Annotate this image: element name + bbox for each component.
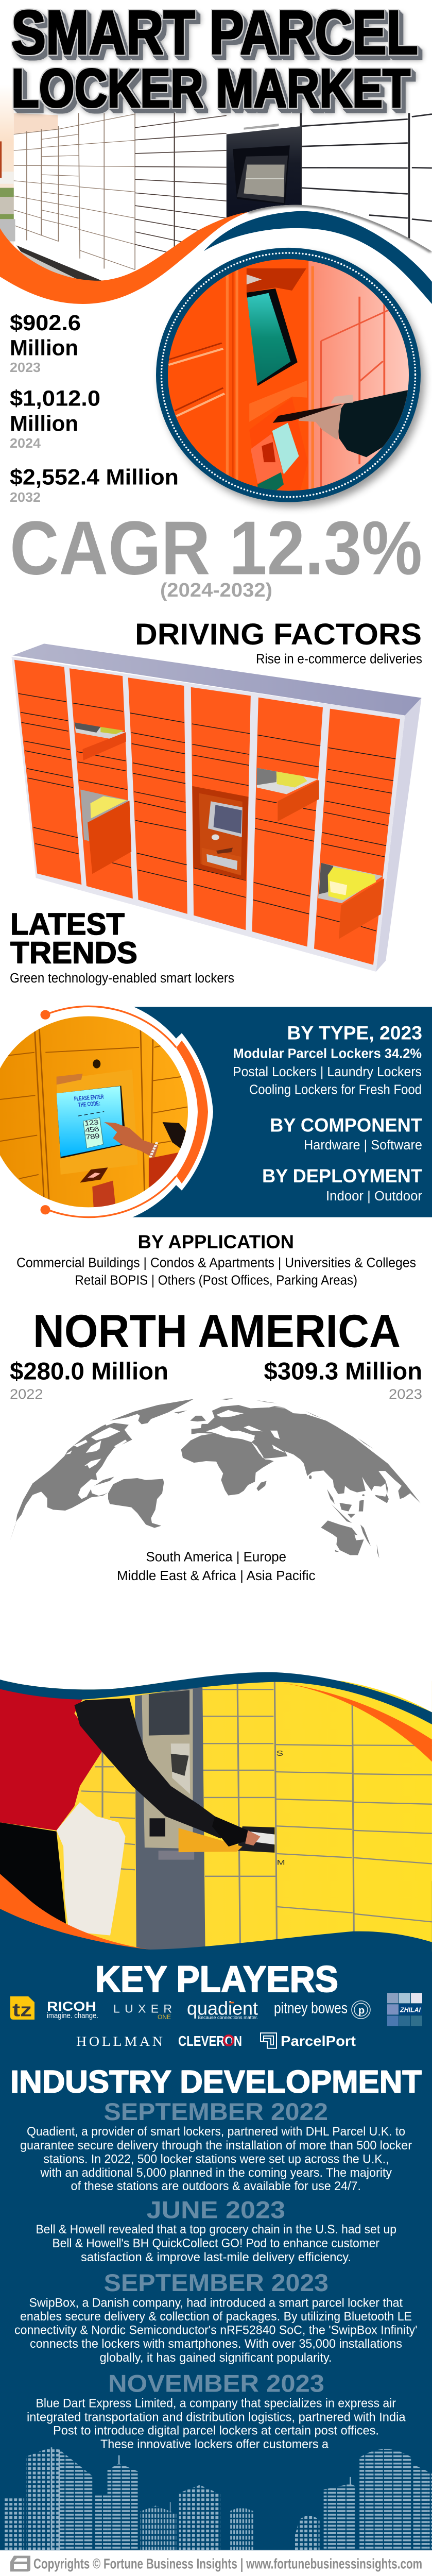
illustration: orange locker bank	[11, 643, 422, 972]
development: November 2023: Blue Dart Express Limited, a company that specializes in express air	[36, 2397, 396, 2410]
U.S. by type: Postal Lockers | Laundry Lockers | Cooling Lockers for Fresh Food	[28, 1643, 404, 1659]
photo: kiosk touch screen	[0, 1015, 191, 1213]
development: September 2022: Quadient, a provider of smart lockers, partnered with DHL Parcel U.K. to	[27, 2125, 405, 2139]
development: November 2023: integrated transportation and distribution logistics, partnered with India	[27, 2411, 406, 2424]
development: June 2023: Bell & Howell revealed that a top grocery chain in the U.S. had set up	[36, 2223, 396, 2236]
driving factors: DRIVING FACTORS	[135, 617, 422, 651]
logo: Pitney Bowes: pitney bowes	[274, 1999, 348, 2016]
heading: by component: BY COMPONENT	[270, 1114, 422, 1136]
other regions	[117, 1549, 315, 1583]
key player logos	[10, 1993, 422, 2049]
development: November 2023: NOVEMBER 2023	[108, 2370, 324, 2397]
development: September 2022: with an additional 5,000 planned in the coming years. The majority	[40, 2166, 392, 2180]
development: September 2023	[14, 2270, 417, 2365]
hero photo: white parcel lockers	[0, 85, 432, 283]
development: September 2023: globally, it has gained significant popularity.	[99, 2351, 332, 2365]
photo: kiosk touch screen: 123	[84, 1118, 99, 1127]
title: Smart Parcel Locker Market	[11, 0, 418, 118]
development: September 2022: of these stations are outdoors & available for use 24/7.	[71, 2179, 361, 2193]
hero waves: orange and blue swooshes	[0, 205, 432, 304]
market value: 2024	[10, 386, 100, 451]
development: September 2022: stations. In 2022, 500 locker stations were set up across the U.K.,	[43, 2153, 389, 2166]
development: September 2023: connects the lockers with smartphones. With over 35,000 installations	[30, 2337, 402, 2351]
type list: Modular Parcel Lockers 34.2%	[233, 1046, 422, 1061]
latest trends	[10, 907, 234, 986]
other regions: South America | Europe	[146, 1549, 286, 1564]
photo: kiosk touch screen: 789	[85, 1132, 100, 1141]
logo: tz	[10, 1996, 34, 2020]
deployment list: Indoor | Outdoor	[326, 1188, 422, 1204]
development: September 2022	[20, 2099, 412, 2193]
development: June 2023: Bell & Howell's BH QuickCollect GO! Pod to enhance customer	[52, 2236, 379, 2250]
logo: Ricoh	[47, 1999, 98, 2020]
north america heading and values: 2023	[389, 1386, 422, 1402]
logo: Quadient: quadient	[187, 1997, 258, 2019]
north america heading and values: NORTH AMERICA	[33, 1305, 401, 1357]
logo: Zhilai	[387, 1993, 422, 2026]
other regions: Middle East & Africa | Asia Pacific	[117, 1568, 315, 1583]
development: September 2023: SEPTEMBER 2023	[104, 2270, 329, 2297]
by application: Retail BOPIS | Others (Post Offices, Parking Areas)	[75, 1273, 357, 1287]
market value: 2024: 2024	[10, 436, 41, 451]
blue footer band	[0, 1881, 432, 2550]
type list	[233, 1046, 422, 1097]
logo: tz: tz	[12, 1999, 32, 2020]
logo: Fortune Business Insights	[10, 2556, 30, 2571]
development: November 2023	[27, 2370, 406, 2451]
city skyline	[4, 2447, 432, 2550]
wave frames around courier photo	[0, 1584, 432, 1954]
market value: 2032: $2,552.4 Million	[10, 465, 179, 489]
heading: key players: KEY PLAYERS	[95, 1959, 338, 2000]
logo: ParcelPort: ParcelPort	[281, 2033, 356, 2049]
north america heading and values: $309.3 Million	[264, 1359, 422, 1385]
development: November 2023: These innovative lockers offer customers a	[100, 2438, 329, 2451]
footer strip	[0, 2550, 432, 2576]
type list: Postal Lockers | Laundry Lockers	[233, 1064, 422, 1079]
component list: Hardware | Software	[304, 1137, 422, 1153]
heading: by type: BY TYPE, 2023	[287, 1022, 422, 1044]
logo: Ricoh: RICOH	[47, 1999, 96, 2014]
circular photo: hand at orange locker	[156, 248, 432, 507]
logo: Pitney Bowes: p	[358, 2005, 365, 2016]
U.S. by type: Modular Parcel Lockers 33.3%	[122, 1625, 310, 1640]
U.S. by type: U.S. BY TYPE, 2023	[127, 1602, 305, 1623]
world map	[10, 1398, 421, 1558]
north america heading and values	[10, 1305, 422, 1402]
market value: 2023	[10, 311, 81, 375]
photo: courier at yellow locker	[0, 1681, 432, 1952]
market value: 2023: Million	[10, 336, 78, 360]
logo: Hollman: HOLLMAN	[76, 2033, 163, 2049]
orange ring accent	[40, 1006, 208, 1217]
latest trends: Green technology-enabled smart lockers	[10, 971, 234, 986]
development: September 2022: SEPTEMBER 2022	[104, 2099, 328, 2126]
latest trends: TRENDS	[10, 936, 137, 970]
logo: Luxer One: LUXER	[113, 2003, 172, 2015]
development: September 2023: enables secure delivery & collection of packages. By utilizing Bluetooth LE	[20, 2310, 412, 2324]
heading: industry development: INDUSTRY DEVELOPMENT	[10, 2064, 422, 2099]
panel: segmentation by type, component and deployment	[0, 1003, 432, 1221]
logo: Quadient: Because connections matter.	[198, 2015, 258, 2021]
logo: Ricoh: imagine. change.	[47, 2012, 98, 2020]
latest trends: LATEST	[10, 907, 125, 941]
photo: courier at yellow locker: M	[277, 1858, 285, 1867]
logo: Luxer One	[113, 2003, 172, 2021]
by application: BY APPLICATION	[138, 1231, 294, 1252]
development: June 2023: JUNE 2023	[146, 2197, 285, 2224]
north america heading and values: 2022	[10, 1386, 43, 1402]
photo: kiosk touch screen: THE CODE:	[78, 1099, 100, 1108]
development: June 2023: satisfaction & improve last-mile delivery efficiency.	[81, 2250, 351, 2264]
U.S. by type	[28, 1602, 404, 1659]
heading: by deployment: BY DEPLOYMENT	[262, 1165, 422, 1187]
market value: 2032	[10, 465, 179, 505]
logo: Cleveron: CLEVERON	[178, 2033, 242, 2049]
by application	[16, 1231, 416, 1287]
development: September 2022: guarantee secure delivery through the installation of more than 500 locker	[20, 2139, 412, 2153]
photo: courier at yellow locker: S	[277, 1749, 283, 1757]
market value: 2023: 2023	[10, 360, 41, 375]
market value: 2023: $902.6	[10, 311, 81, 335]
logo: Luxer One: ONE	[158, 2014, 171, 2021]
market value: 2024: $1,012.0	[10, 386, 100, 411]
development: November 2023: Post to introduce digital parcel lockers at certain post offices.	[53, 2424, 379, 2438]
north america heading and values: $280.0 Million	[10, 1359, 168, 1385]
logo: Zhilai: ZHILAI	[400, 2006, 421, 2014]
development: June 2023	[36, 2197, 396, 2264]
photo: kiosk touch screen: 456	[84, 1126, 100, 1134]
development: September 2023: SwipBox, a Danish company, had introduced a smart parcel locker that	[29, 2296, 403, 2310]
CAGR figure: (2024-2032)	[160, 579, 272, 601]
photo: kiosk touch screen: PLEASE ENTER	[74, 1093, 104, 1102]
market value: 2032: 2032	[10, 490, 41, 505]
market value: 2024: Million	[10, 412, 78, 436]
driving factors	[135, 617, 422, 666]
